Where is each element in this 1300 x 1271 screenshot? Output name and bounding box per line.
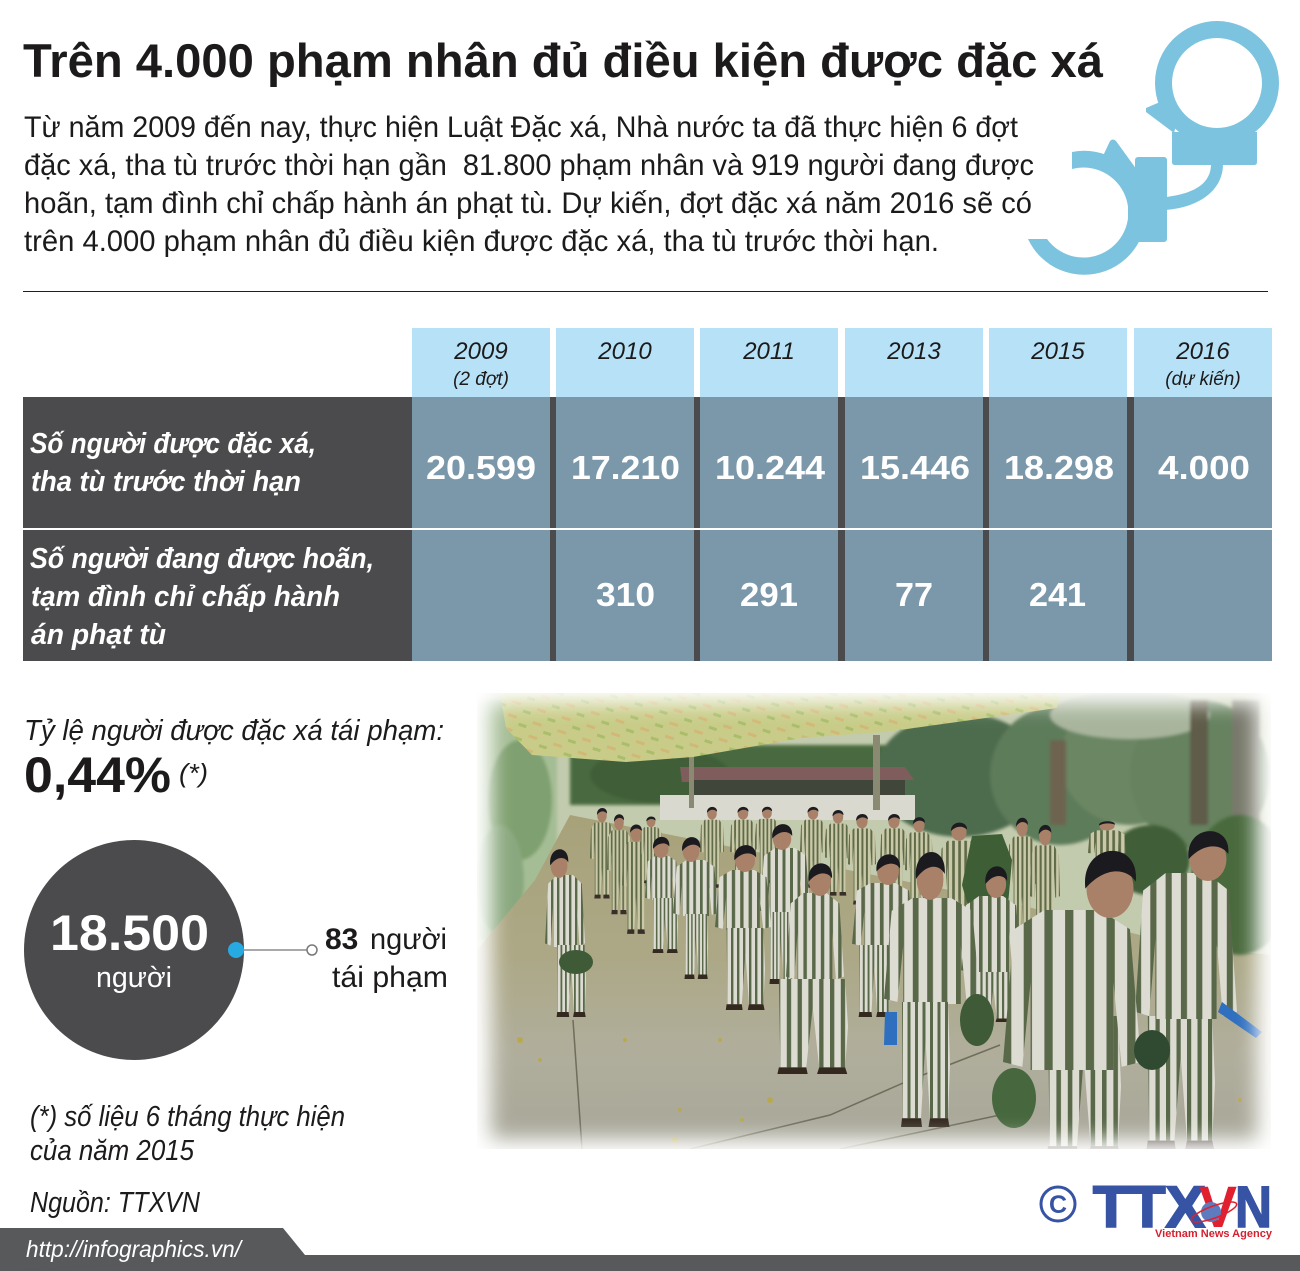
- table header row: (2 đợt): [453, 369, 509, 390]
- logo wordmark: V: [1199, 1175, 1237, 1240]
- table row: suspended: Số người đang được hoãn,: [30, 543, 374, 575]
- callout: 83 reoffenders: 83: [325, 923, 358, 956]
- footer bar: [0, 1228, 1300, 1271]
- table row: suspended: [23, 530, 1272, 661]
- intro text: trên 4.000 phạm nhân đủ điều kiện được đặc xá, tha tù trước thời hạn.: [24, 225, 939, 258]
- photo middle marchers: [645, 824, 1021, 1074]
- photo crowd back row: [590, 806, 1126, 934]
- photo standing man: [545, 849, 593, 1017]
- footer bar: http://infographics.vn/: [26, 1236, 244, 1262]
- table header row: [412, 328, 1272, 397]
- title: Trên 4.000 phạm nhân đủ điều kiện được đặc xá: [23, 34, 1104, 87]
- table header row: (dự kiến): [1165, 369, 1241, 390]
- photo pavement cracks: [573, 1020, 1000, 1149]
- photo front marchers: [884, 831, 1262, 1156]
- logo wordmark: N: [1235, 1175, 1272, 1240]
- callout: 83 reoffenders: [325, 923, 448, 994]
- table row: released: [23, 397, 1272, 528]
- table row: released: 18.298: [1004, 449, 1114, 486]
- table row: released: Số người được đặc xá,: [30, 428, 316, 460]
- intro text: hoãn, tạm đình chỉ chấp hành án phạt tù. Dự kiến, đợt đặc xá năm 2016 sẽ có: [24, 187, 1032, 220]
- logo wordmark: [1093, 1175, 1272, 1240]
- table row: released: 10.244: [715, 449, 826, 486]
- intro text: đặc xá, tha tù trước thời hạn gần 81.800 phạm nhân và 919 người đang được: [24, 149, 1034, 182]
- photo building: [660, 767, 915, 820]
- table row: suspended: 241: [1029, 576, 1086, 613]
- table header row: 2013: [886, 338, 941, 365]
- divider: [23, 291, 1268, 292]
- logo tagline: Vietnam News Agency: [1155, 1228, 1273, 1240]
- logo copyright mark: [1041, 1187, 1075, 1221]
- recidivism rate heading: 0,44%: [24, 747, 171, 803]
- table row: suspended: án phạt tù: [31, 619, 166, 651]
- photo canopy: [500, 693, 1060, 762]
- table header row: 2015: [1030, 338, 1085, 365]
- photo ground: [477, 815, 1271, 1149]
- table row: released: 4.000: [1158, 449, 1250, 486]
- intro text: Từ năm 2009 đến nay, thực hiện Luật Đặc xá, Nhà nước ta đã thực hiện 6 đợt: [24, 111, 1019, 144]
- table row: suspended: 291: [740, 576, 798, 613]
- logo wordmark: TTX: [1093, 1175, 1205, 1240]
- photo fallen leaves: [517, 1037, 1242, 1143]
- table row: released: 20.599: [426, 449, 536, 486]
- recidivism rate heading: [24, 715, 444, 803]
- footnote: của năm 2015: [30, 1135, 195, 1167]
- photo bush: [1118, 814, 1271, 957]
- intro text: [24, 111, 1034, 258]
- table row: suspended: tạm đình chỉ chấp hành: [31, 581, 340, 613]
- recidivism rate heading: Tỷ lệ người được đặc xá tái phạm:: [24, 715, 444, 747]
- photo poles: [689, 735, 880, 810]
- logo: TTXVN: [1041, 1175, 1273, 1240]
- footnote: [30, 1101, 345, 1167]
- table row: suspended: 310: [596, 576, 655, 613]
- table: [23, 328, 1272, 661]
- table header row: 2009: [453, 338, 508, 365]
- callout: 83 reoffenders: tái phạm: [332, 961, 448, 994]
- photo: prisoners walking: [476, 691, 1290, 1156]
- table header row: 2010: [597, 338, 652, 365]
- table header row: 2016: [1175, 338, 1230, 365]
- source: Nguồn: TTXVN: [30, 1187, 200, 1219]
- table row: released: 15.446: [860, 449, 970, 486]
- table row: released: 17.210: [571, 449, 680, 486]
- callout: 83 reoffenders: người: [370, 923, 447, 956]
- table row: released: tha tù trước thời hạn: [31, 466, 301, 498]
- logo copyright mark: C: [1049, 1191, 1067, 1219]
- table row: suspended: 77: [895, 576, 933, 613]
- circle: 18.500 people: [24, 840, 244, 1060]
- photo background trees: [476, 691, 1270, 940]
- circle: 18.500 people: 18.500: [50, 905, 209, 961]
- icon: handcuffs: [1028, 21, 1279, 275]
- connector line: [228, 942, 317, 958]
- table header row: 2011: [742, 338, 795, 365]
- photo officer: [962, 834, 1012, 904]
- recidivism rate heading: (*): [179, 758, 208, 788]
- footnote: (*) số liệu 6 tháng thực hiện: [30, 1101, 345, 1133]
- circle: 18.500 people: người: [96, 962, 172, 994]
